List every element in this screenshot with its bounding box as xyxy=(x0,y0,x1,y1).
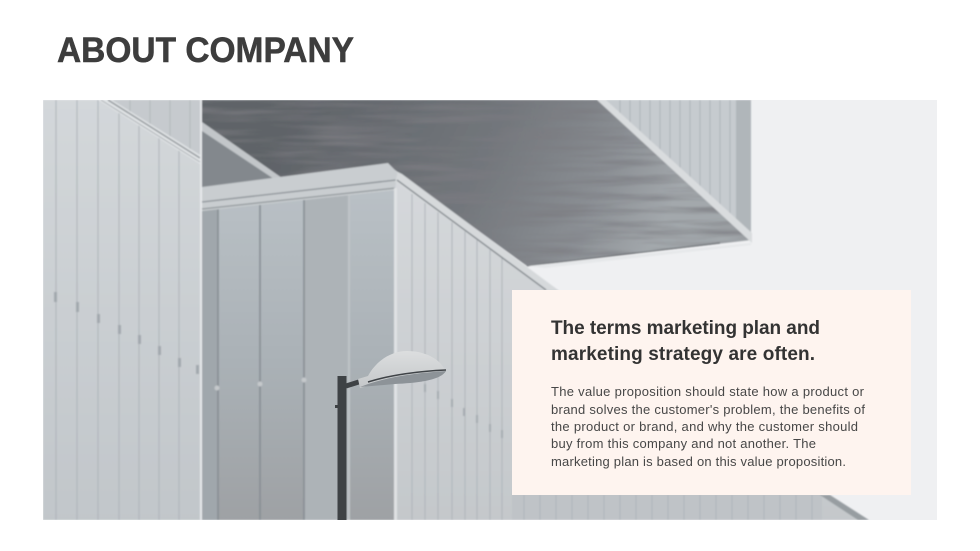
left wall xyxy=(43,100,202,520)
centre building face xyxy=(202,163,398,520)
right wall xyxy=(394,172,869,520)
card body text: brand solves the customer's problem, the benefits of xyxy=(551,402,865,417)
roof band xyxy=(202,163,398,211)
concrete ceiling underside xyxy=(202,100,751,266)
card heading: marketing strategy are often. xyxy=(551,344,815,365)
upper right building wall xyxy=(604,100,751,234)
building image xyxy=(43,100,869,520)
street lamp xyxy=(335,351,446,520)
card heading xyxy=(551,318,820,365)
lamp arm xyxy=(346,381,362,386)
glass behind centre block xyxy=(202,122,282,190)
title: ABOUT COMPANY xyxy=(57,31,354,70)
lamp head xyxy=(358,351,445,388)
card body text: marketing plan is based on this value proposition. xyxy=(551,454,846,469)
slanted roof edge xyxy=(395,172,462,222)
card heading: The terms marketing plan and xyxy=(551,318,820,339)
card body text xyxy=(551,384,865,469)
panel: text card xyxy=(512,290,911,495)
bolts xyxy=(424,384,503,438)
card body text: The value proposition should state how a product or xyxy=(551,384,865,399)
card body text: buy from this company and not another. The xyxy=(551,436,816,451)
wall bolts xyxy=(54,292,199,374)
bolts xyxy=(214,378,306,390)
lamp pole xyxy=(338,376,346,520)
card body text: the product or brand, and why the customer should xyxy=(551,419,858,434)
sky background xyxy=(43,100,937,520)
photo: grey building with street lamp xyxy=(43,100,937,520)
overhang light edge xyxy=(597,100,752,243)
